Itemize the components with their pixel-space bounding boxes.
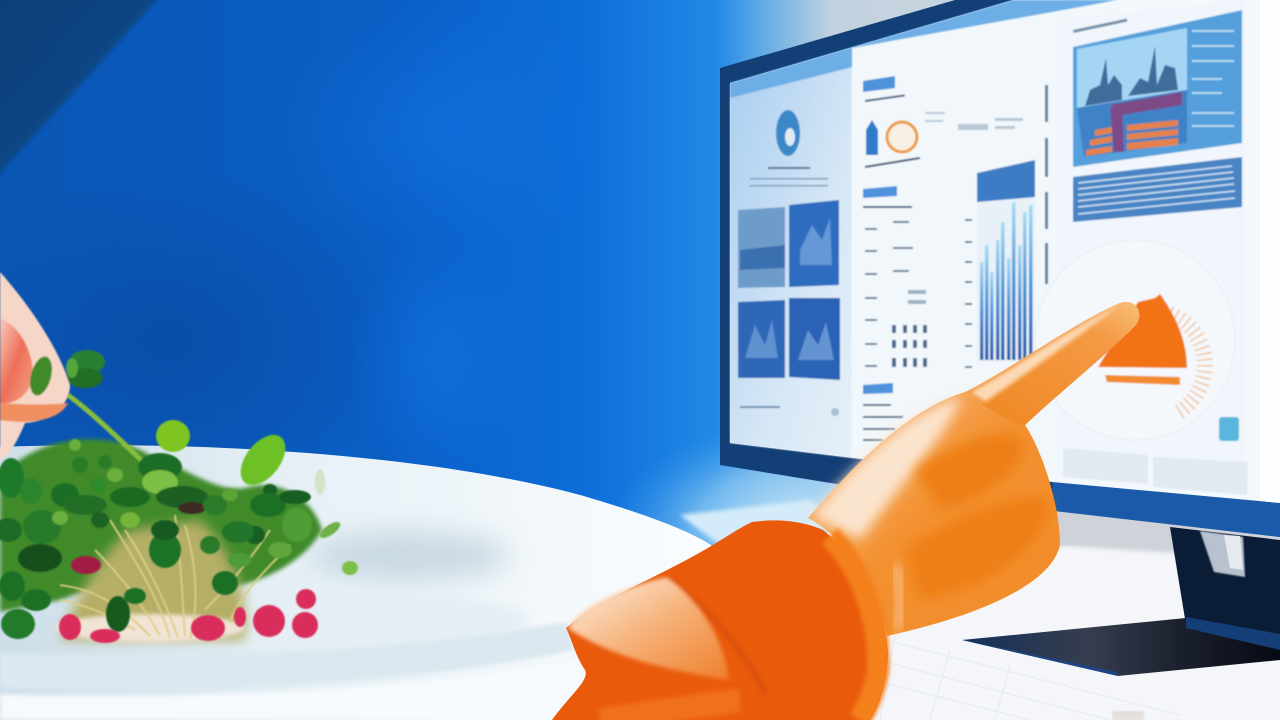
small teal icon (1219, 417, 1239, 441)
dashboard column 2 (852, 0, 1118, 480)
monitor lower bezel (1052, 481, 1280, 537)
microgreens (0, 350, 358, 643)
pointing hand (808, 302, 1139, 636)
wall behind monitor (1050, 505, 1280, 560)
thumb (0, 403, 68, 422)
sprout stems (60, 515, 290, 638)
logo icon (776, 110, 800, 156)
dark corner (0, 0, 175, 195)
monitor stand (1170, 527, 1280, 650)
cream highlight (812, 396, 962, 540)
vessel icon (866, 120, 878, 155)
bottom buttons (1063, 448, 1148, 484)
data grid (892, 290, 927, 367)
green mass (0, 439, 322, 612)
monitor (720, 0, 1280, 676)
white screen right margin (1260, 0, 1280, 503)
main stem (68, 395, 160, 478)
plate well shading (310, 532, 510, 580)
orange ring gauge (887, 122, 917, 152)
forearm peach patch (568, 577, 729, 680)
desk surface (540, 500, 1280, 720)
dashboard column 3 (1035, 0, 1248, 495)
top image panel (1073, 10, 1242, 167)
fingertip (0, 318, 33, 403)
orange sleeve (552, 520, 888, 720)
plate (0, 445, 717, 720)
orange dome chart (1035, 240, 1235, 440)
chef fingers holding sprout (0, 272, 70, 460)
light blue glow behind desk (610, 420, 990, 640)
chef coat folds (0, 0, 620, 510)
stem fan base (60, 520, 246, 640)
pale roots (55, 614, 245, 642)
held leaf (26, 354, 56, 398)
leaves (0, 350, 358, 639)
cuff bands (600, 536, 878, 720)
dashboard column 1 (730, 0, 1118, 458)
pointing finger (968, 302, 1139, 425)
monitor frame (720, 0, 1280, 537)
finger highlight (970, 305, 1120, 402)
keyboard (872, 635, 1180, 720)
toolbar (730, 0, 1118, 98)
plate well floor (150, 592, 530, 648)
monitor base (962, 617, 1280, 676)
plate rim (0, 622, 574, 690)
radish pieces (59, 556, 318, 643)
blue text banner (1073, 157, 1242, 222)
table labels (865, 219, 972, 368)
knuckle folds (905, 434, 1049, 600)
side dashes (1045, 85, 1048, 284)
thumbnail images (738, 200, 840, 380)
bar chart panel (977, 160, 1035, 362)
monitor screen (730, 0, 1280, 503)
